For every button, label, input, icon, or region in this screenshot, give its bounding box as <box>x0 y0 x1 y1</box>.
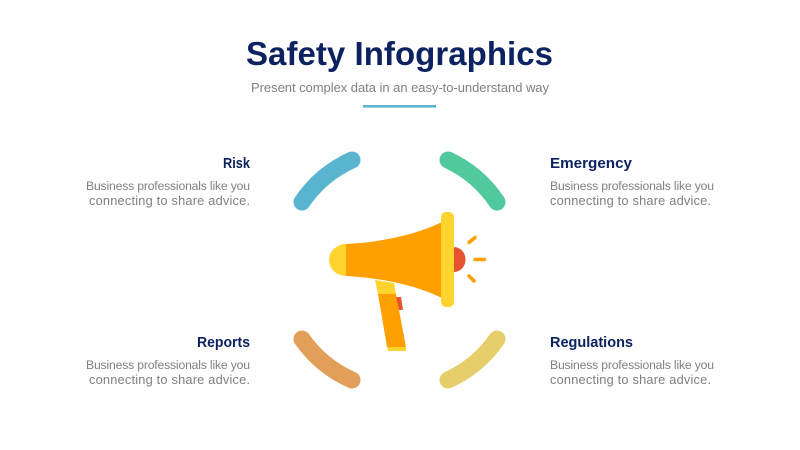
text block: risk <box>86 179 250 208</box>
text block: emergency <box>550 179 714 208</box>
megaphone handle neck <box>375 280 396 294</box>
megaphone rim <box>441 212 454 307</box>
text block: risk: Business professionals like you <box>86 179 250 193</box>
title underline <box>363 105 436 108</box>
heading: emergency: Emergency <box>550 155 633 172</box>
arc: blue <box>302 160 352 202</box>
text block: regulations <box>550 358 714 387</box>
text block: reports <box>86 358 250 387</box>
heading: regulations: Regulations <box>550 334 633 351</box>
arc: yellow <box>448 339 497 380</box>
text block: emergency: Business professionals like you <box>550 179 714 193</box>
megaphone trigger <box>396 297 403 310</box>
megaphone back cap <box>329 244 346 276</box>
megaphone cone <box>346 222 442 298</box>
heading: risk: Risk <box>223 155 251 172</box>
text block: reports: connecting to share advice. <box>89 372 250 387</box>
subtitle: Present complex data in an easy-to-understand way <box>251 80 550 95</box>
arc: orange <box>302 339 352 380</box>
panel: emergency <box>550 155 714 208</box>
heading: reports: Reports <box>197 334 250 351</box>
panel: regulations <box>550 334 714 387</box>
megaphone speaker <box>454 247 466 272</box>
title: Safety Infographics <box>246 35 553 72</box>
megaphone handle base <box>387 347 406 351</box>
arc: green <box>448 160 497 202</box>
panel: risk <box>86 155 251 208</box>
text block: risk: connecting to share advice. <box>89 193 250 208</box>
icon: megaphone <box>329 212 484 351</box>
text block: emergency: connecting to share advice. <box>550 193 711 208</box>
sound rays <box>469 238 484 281</box>
megaphone handle <box>378 294 406 347</box>
text block: regulations: Business professionals like you <box>550 358 714 372</box>
text block: regulations: connecting to share advice. <box>550 372 711 387</box>
panel: reports <box>86 334 250 387</box>
text block: reports: Business professionals like you <box>86 358 250 372</box>
